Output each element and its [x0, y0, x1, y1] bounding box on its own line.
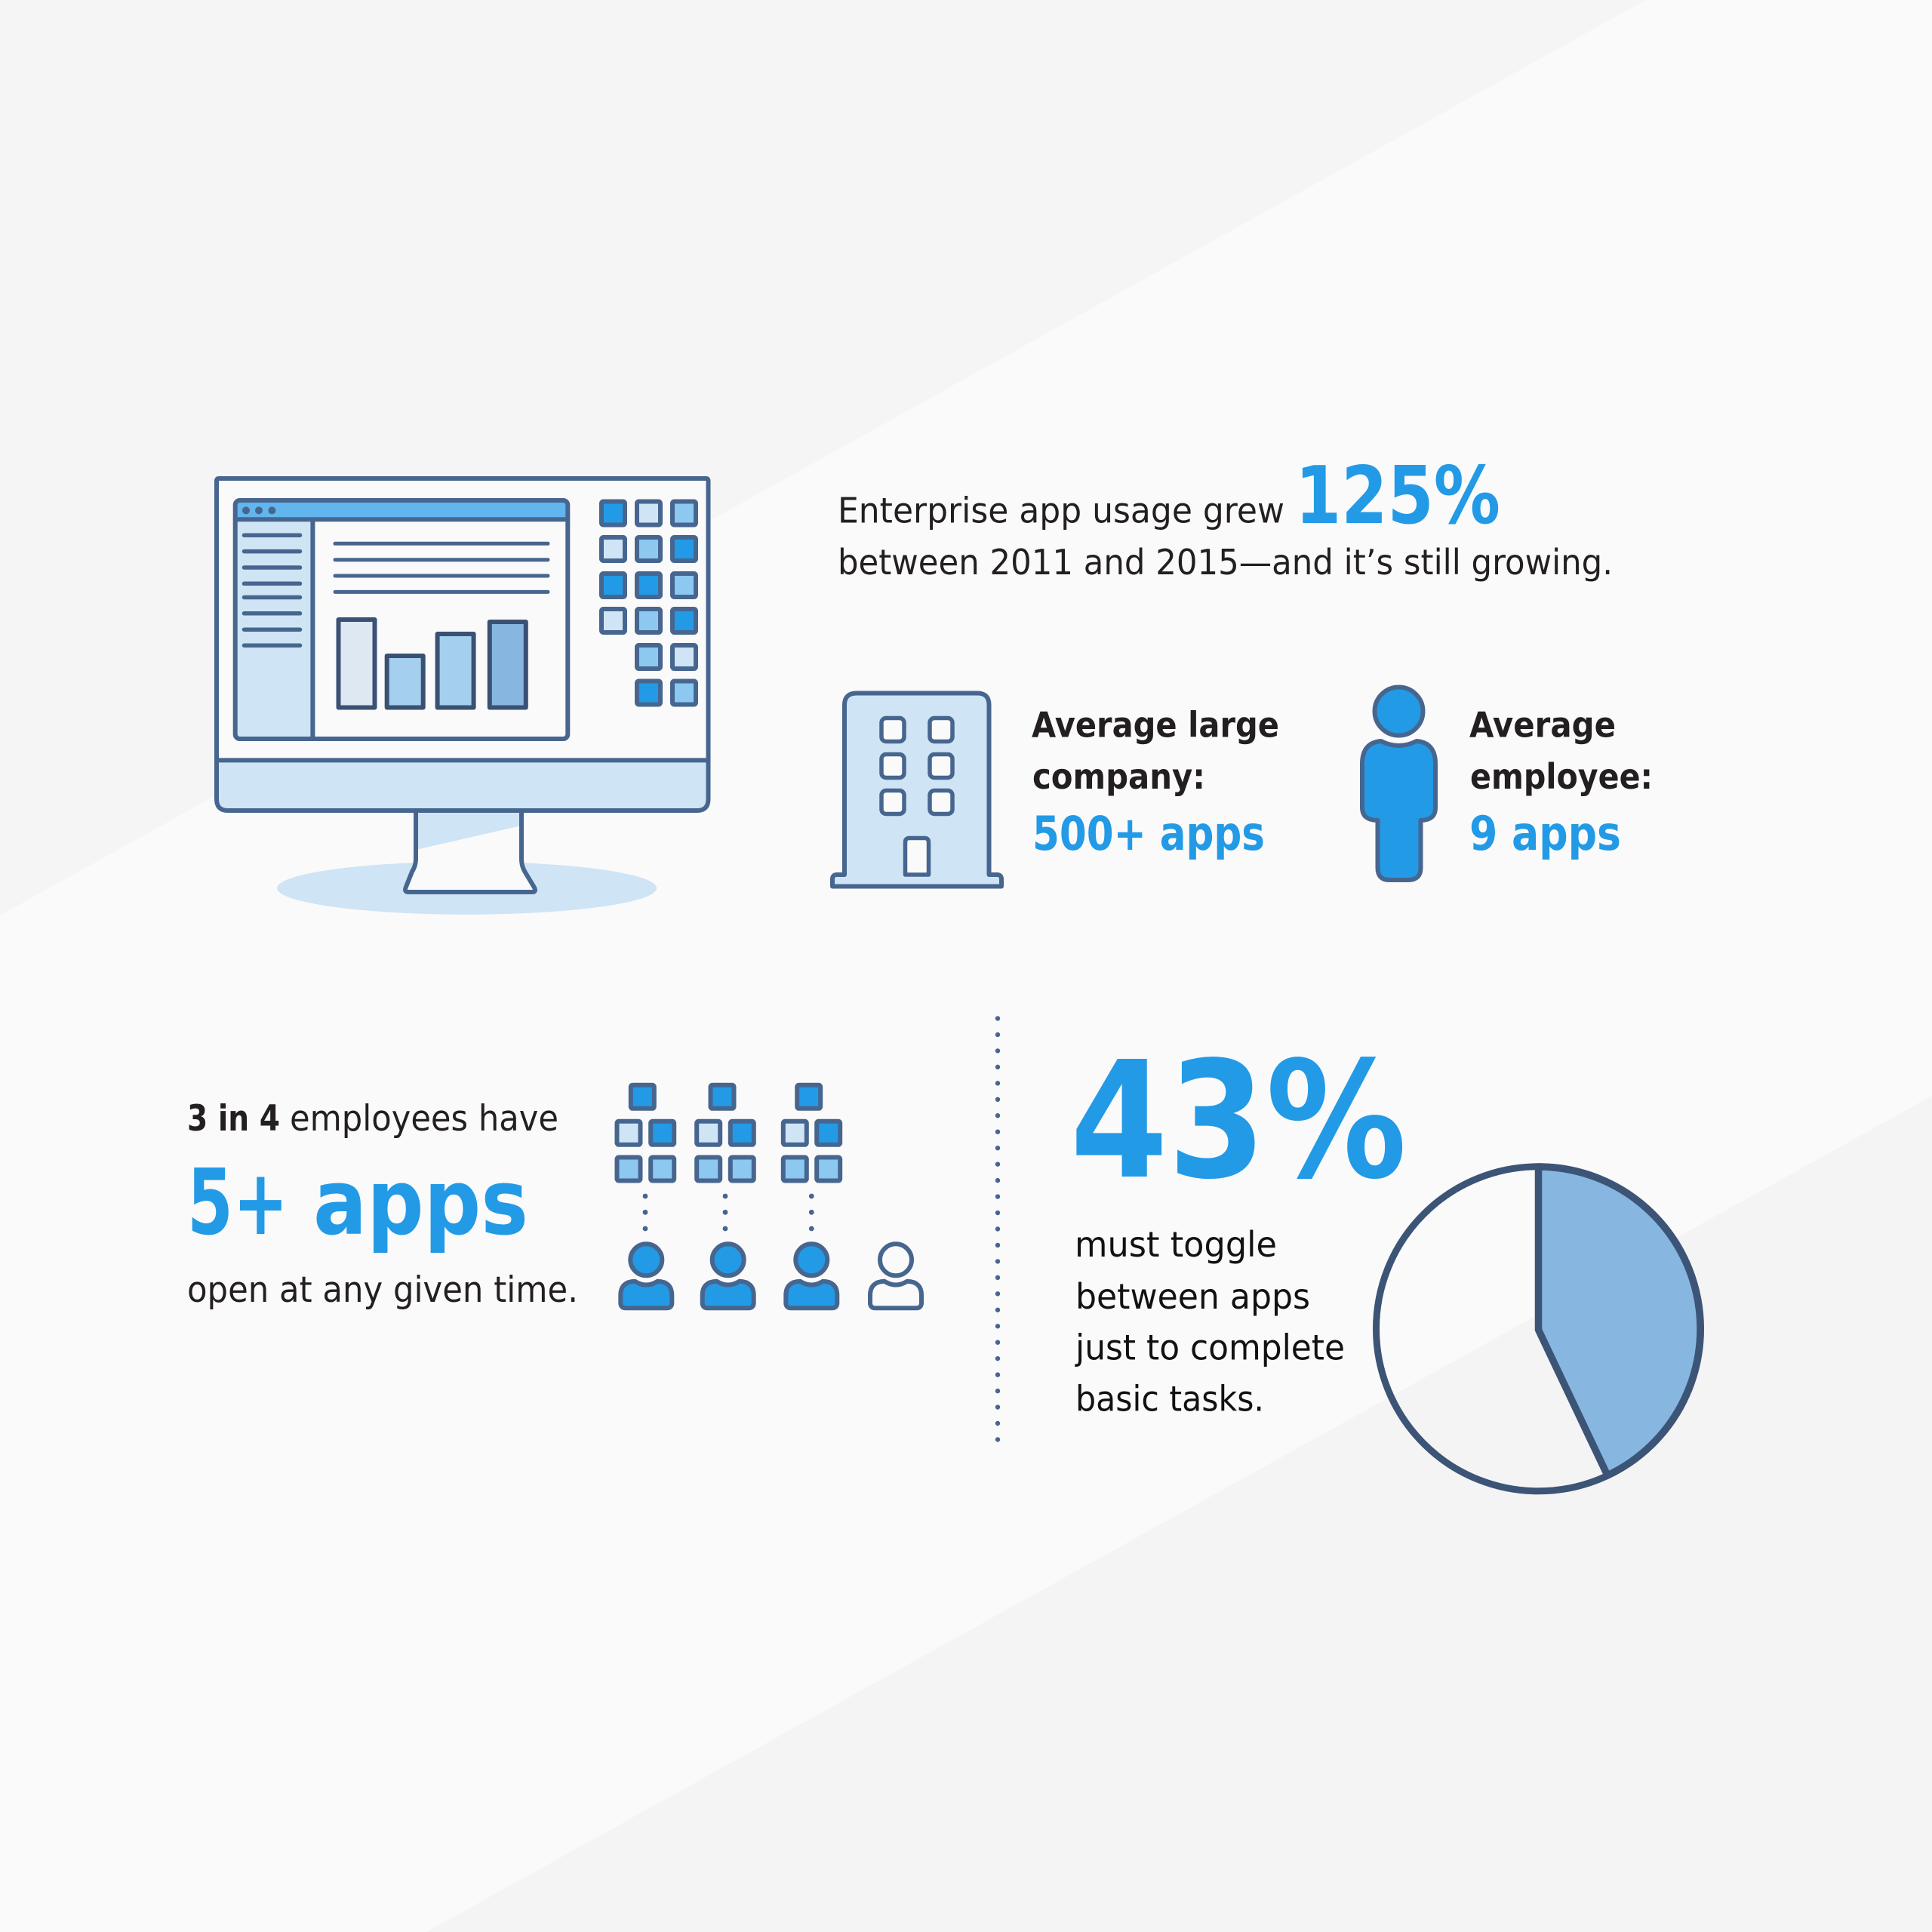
text block: must toggle: between apps — [1075, 1276, 1310, 1317]
person 1 — [620, 1244, 672, 1308]
app window — [235, 500, 568, 739]
stat: average employee — [1469, 705, 1653, 861]
text block: 3 in 4 employees: open at any given time. — [187, 1269, 578, 1311]
connector dots — [643, 1194, 814, 1231]
stat: average large company: 500+ apps — [1032, 806, 1265, 861]
stat: average large company: Average large — [1032, 705, 1279, 746]
text block: 3 in 4 employees: 3 in 4 — [187, 1098, 280, 1140]
monitor body — [217, 478, 708, 811]
stat: 5+ apps: 5+ — [187, 1151, 288, 1256]
stat: 125%: 125% — [1295, 450, 1500, 542]
app icon grid — [601, 501, 696, 705]
illustration: desktop monitor — [217, 478, 708, 915]
text block: must toggle — [1075, 1224, 1345, 1419]
headline: usage growth: Enterprise app usage grew — [838, 491, 1284, 531]
stat: 5+ apps: apps — [313, 1151, 528, 1256]
app group 1 — [617, 1085, 674, 1180]
app group 2 — [697, 1085, 754, 1180]
monitor shadow ellipse — [277, 862, 657, 915]
building windows — [881, 718, 952, 814]
stat: average large company — [1032, 705, 1279, 861]
text block: must toggle: must toggle — [1075, 1224, 1277, 1265]
text block: 3 in 4 employees: employees have — [290, 1098, 558, 1140]
icon: office building — [832, 693, 1001, 886]
stat: average employee: employee: — [1470, 756, 1653, 797]
bar chart — [338, 620, 526, 708]
stat: average employee: Average — [1469, 705, 1616, 746]
stat: average employee: 9 apps — [1469, 806, 1621, 861]
stat: 5+ apps — [187, 1151, 528, 1256]
text block: must toggle: just to complete — [1075, 1327, 1345, 1368]
pie chart: 43 percent — [1377, 1167, 1701, 1491]
person 3 — [786, 1244, 837, 1308]
sidebar lines — [245, 535, 300, 645]
building door — [906, 838, 928, 875]
content text lines — [335, 543, 548, 592]
headline: usage growth — [838, 450, 1613, 583]
pie outline — [1377, 1167, 1701, 1491]
pie slice — [1538, 1167, 1700, 1475]
person 4 outline — [870, 1244, 921, 1308]
text block: must toggle: basic tasks. — [1075, 1378, 1264, 1419]
icon: app squares and people — [617, 1085, 921, 1308]
stat: 43%: 43% — [1070, 1027, 1407, 1215]
app group 3 — [783, 1085, 840, 1180]
vertical dotted divider — [995, 1019, 1000, 1440]
text block: 3 in 4 employees — [187, 1098, 578, 1311]
monitor stand — [405, 810, 535, 892]
person 2 — [703, 1244, 754, 1308]
icon: single employee — [1362, 687, 1435, 880]
stat: average large company: company: — [1032, 756, 1205, 797]
window control dots — [242, 506, 275, 514]
headline: usage growth: between 2011 and 2015—and it’s still growing. — [838, 542, 1613, 583]
